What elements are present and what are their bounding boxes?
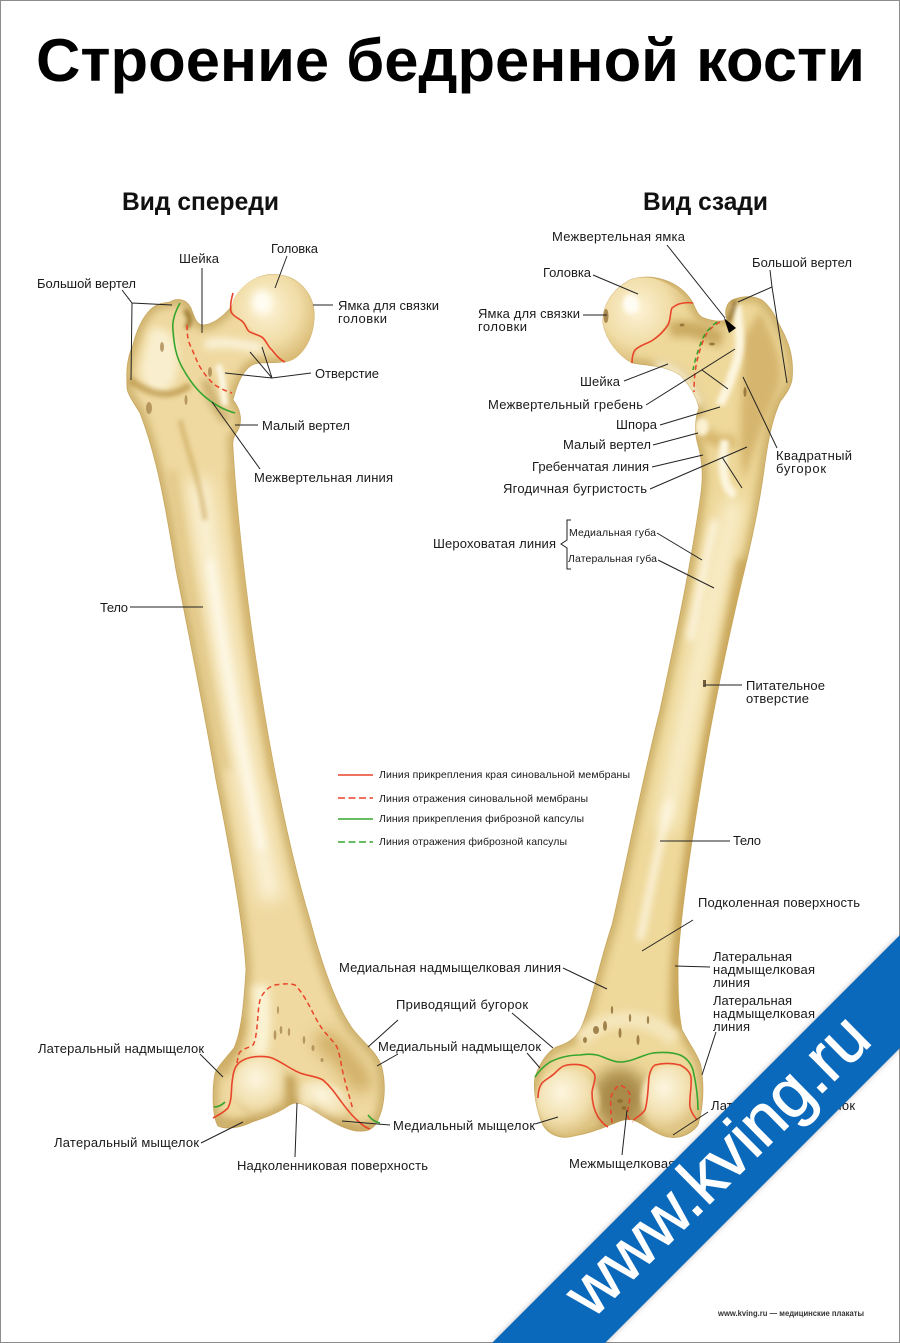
label: intertrochanteric crest: Межвертельный гребень [488, 397, 643, 412]
label: neck [580, 364, 668, 389]
capsule and synovial lines: front view [173, 293, 380, 1129]
label: pectineal line: Гребенчатая линия [532, 459, 649, 474]
label: intertrochanteric fossa: Межвертельная ямка [552, 229, 686, 244]
label: gluteal tuberosity [503, 447, 747, 496]
heading: rear view: Вид сзади [643, 188, 768, 216]
label: lateral epicondyle [38, 1041, 223, 1077]
label: fovea of head: Ямка для связки [478, 306, 580, 321]
label: greater trochanter [37, 276, 172, 380]
label: neck: Шейка [179, 251, 220, 266]
labels: rear view [339, 229, 860, 1171]
diagonal banner [492, 935, 900, 1343]
label: linea aspera [433, 520, 571, 569]
label: lateral supracondylar line: линия [713, 975, 750, 990]
femur: rear view illustration [534, 277, 793, 1138]
label: lateral supracondylar line [675, 949, 815, 990]
label: neck: Шейка [580, 374, 621, 389]
label: intertrochanteric line: Межвертельная линия [254, 470, 393, 485]
capsule and synovial lines: rear view [535, 303, 720, 1127]
label: popliteal surface: Подколенная поверхность [698, 895, 860, 910]
label: quadrate tubercle: Квадратный [776, 448, 852, 463]
label: medial epicondyle [377, 1039, 541, 1068]
label: gluteal tuberosity: Ягодичная бугристость [503, 481, 647, 496]
heading: front view: Вид спереди [122, 188, 279, 216]
label: body [660, 833, 761, 848]
labels: front view [37, 241, 558, 1173]
legend item: synovial reflection: Линия отражения синовальной мембраны [379, 793, 588, 805]
label: lesser trochanter [563, 433, 698, 452]
label: medial supracondylar line [339, 960, 607, 989]
label: spur [616, 407, 720, 432]
label: lateral condyle: Латеральный мыщелок [711, 1098, 855, 1113]
label: intercondylar fossa: Межмыщелковая ямка [569, 1156, 710, 1171]
label: greater trochanter [738, 255, 852, 383]
label: body: Тело [100, 600, 128, 615]
label: lateral condyle [673, 1098, 855, 1135]
label: lateral supracondylar line (second): Латеральная [713, 993, 792, 1008]
label: fovea of head: головки [338, 311, 387, 326]
label: lateral supracondylar line (second): линия [713, 1019, 750, 1034]
label: greater trochanter: Большой вертел [752, 255, 852, 270]
label: head: Головка [543, 265, 592, 280]
label: spur: Шпора [616, 417, 658, 432]
legend item: synovial attachment: Линия прикрепления края синовальной мембраны [379, 769, 630, 781]
label: lesser trochanter: Малый вертел [563, 437, 651, 452]
femoral head (front) [232, 274, 314, 362]
label: medial lip [569, 527, 702, 560]
label: linea aspera: Шероховатая линия [433, 536, 556, 551]
label: intercondylar fossa [569, 1110, 710, 1171]
femoral head (rear) [603, 277, 685, 363]
label: pectineal line [532, 455, 703, 474]
label: medial supracondylar line: Медиальная надмыщелковая линия [339, 960, 561, 975]
label: greater trochanter: Большой вертел [37, 276, 136, 291]
label: adductor tubercle: Приводящий бугорок [396, 997, 528, 1012]
legend item: fibrous reflection: Линия отражения фиброзной капсулы [379, 836, 567, 848]
label: popliteal surface [642, 895, 860, 951]
label: lesser trochanter: Малый вертел [262, 418, 350, 433]
label: lateral supracondylar line: надмыщелковая [713, 962, 815, 977]
label: lateral supracondylar line (second): надмыщелковая [713, 1006, 815, 1021]
label: medial condyle: Медиальный мыщелок [393, 1118, 535, 1133]
label: fovea of head [478, 306, 607, 334]
label: head [271, 241, 319, 288]
label: lateral supracondylar line: Латеральная [713, 949, 792, 964]
label: lateral lip [568, 553, 714, 588]
label: nutrient foramen: отверстие [746, 691, 809, 706]
label: lateral condyle [54, 1122, 243, 1150]
label: quadrate tubercle [743, 377, 852, 476]
title: Строение бедренной кости [36, 27, 865, 94]
label: foramina [225, 347, 379, 381]
label: lateral supracondylar line (second) [702, 993, 815, 1075]
label: fovea of head: головки [478, 319, 527, 334]
label: patellar surface: Надколенниковая поверхность [237, 1158, 428, 1173]
label: intertrochanteric crest [488, 349, 735, 412]
label: fovea of head [313, 298, 439, 326]
label: neck [179, 251, 220, 333]
label: body [100, 600, 203, 615]
label: fovea of head: Ямка для связки [338, 298, 439, 313]
footer credit: www.kving.ru — медицинские плакаты [717, 1309, 864, 1318]
label: foramina: Отверстие [315, 366, 379, 381]
label: lateral epicondyle: Латеральный надмыщелок [38, 1041, 204, 1056]
label: body: Тело [733, 833, 761, 848]
label: head [543, 265, 638, 294]
label: medial epicondyle: Медиальный надмыщелок [378, 1039, 541, 1054]
legend [338, 769, 630, 848]
label: medial lip: Медиальная губа [569, 527, 656, 539]
label: nutrient foramen: Питательное [746, 678, 825, 693]
banner text: www.kving.ru [548, 999, 884, 1331]
label: nutrient foramen [705, 678, 825, 706]
label: intertrochanteric line [212, 402, 393, 485]
label: medial condyle [342, 1117, 558, 1133]
label: quadrate tubercle: бугорок [776, 461, 826, 476]
femur: front view illustration [127, 274, 384, 1134]
legend item: fibrous attachment: Линия прикрепления фиброзной капсулы [379, 813, 584, 825]
label: adductor tubercle [368, 997, 553, 1048]
label: lateral condyle: Латеральный мыщелок [54, 1135, 199, 1150]
label: head: Головка [271, 241, 319, 256]
label: intertrochanteric fossa [552, 229, 736, 333]
label: lateral lip: Латеральная губа [568, 553, 657, 565]
